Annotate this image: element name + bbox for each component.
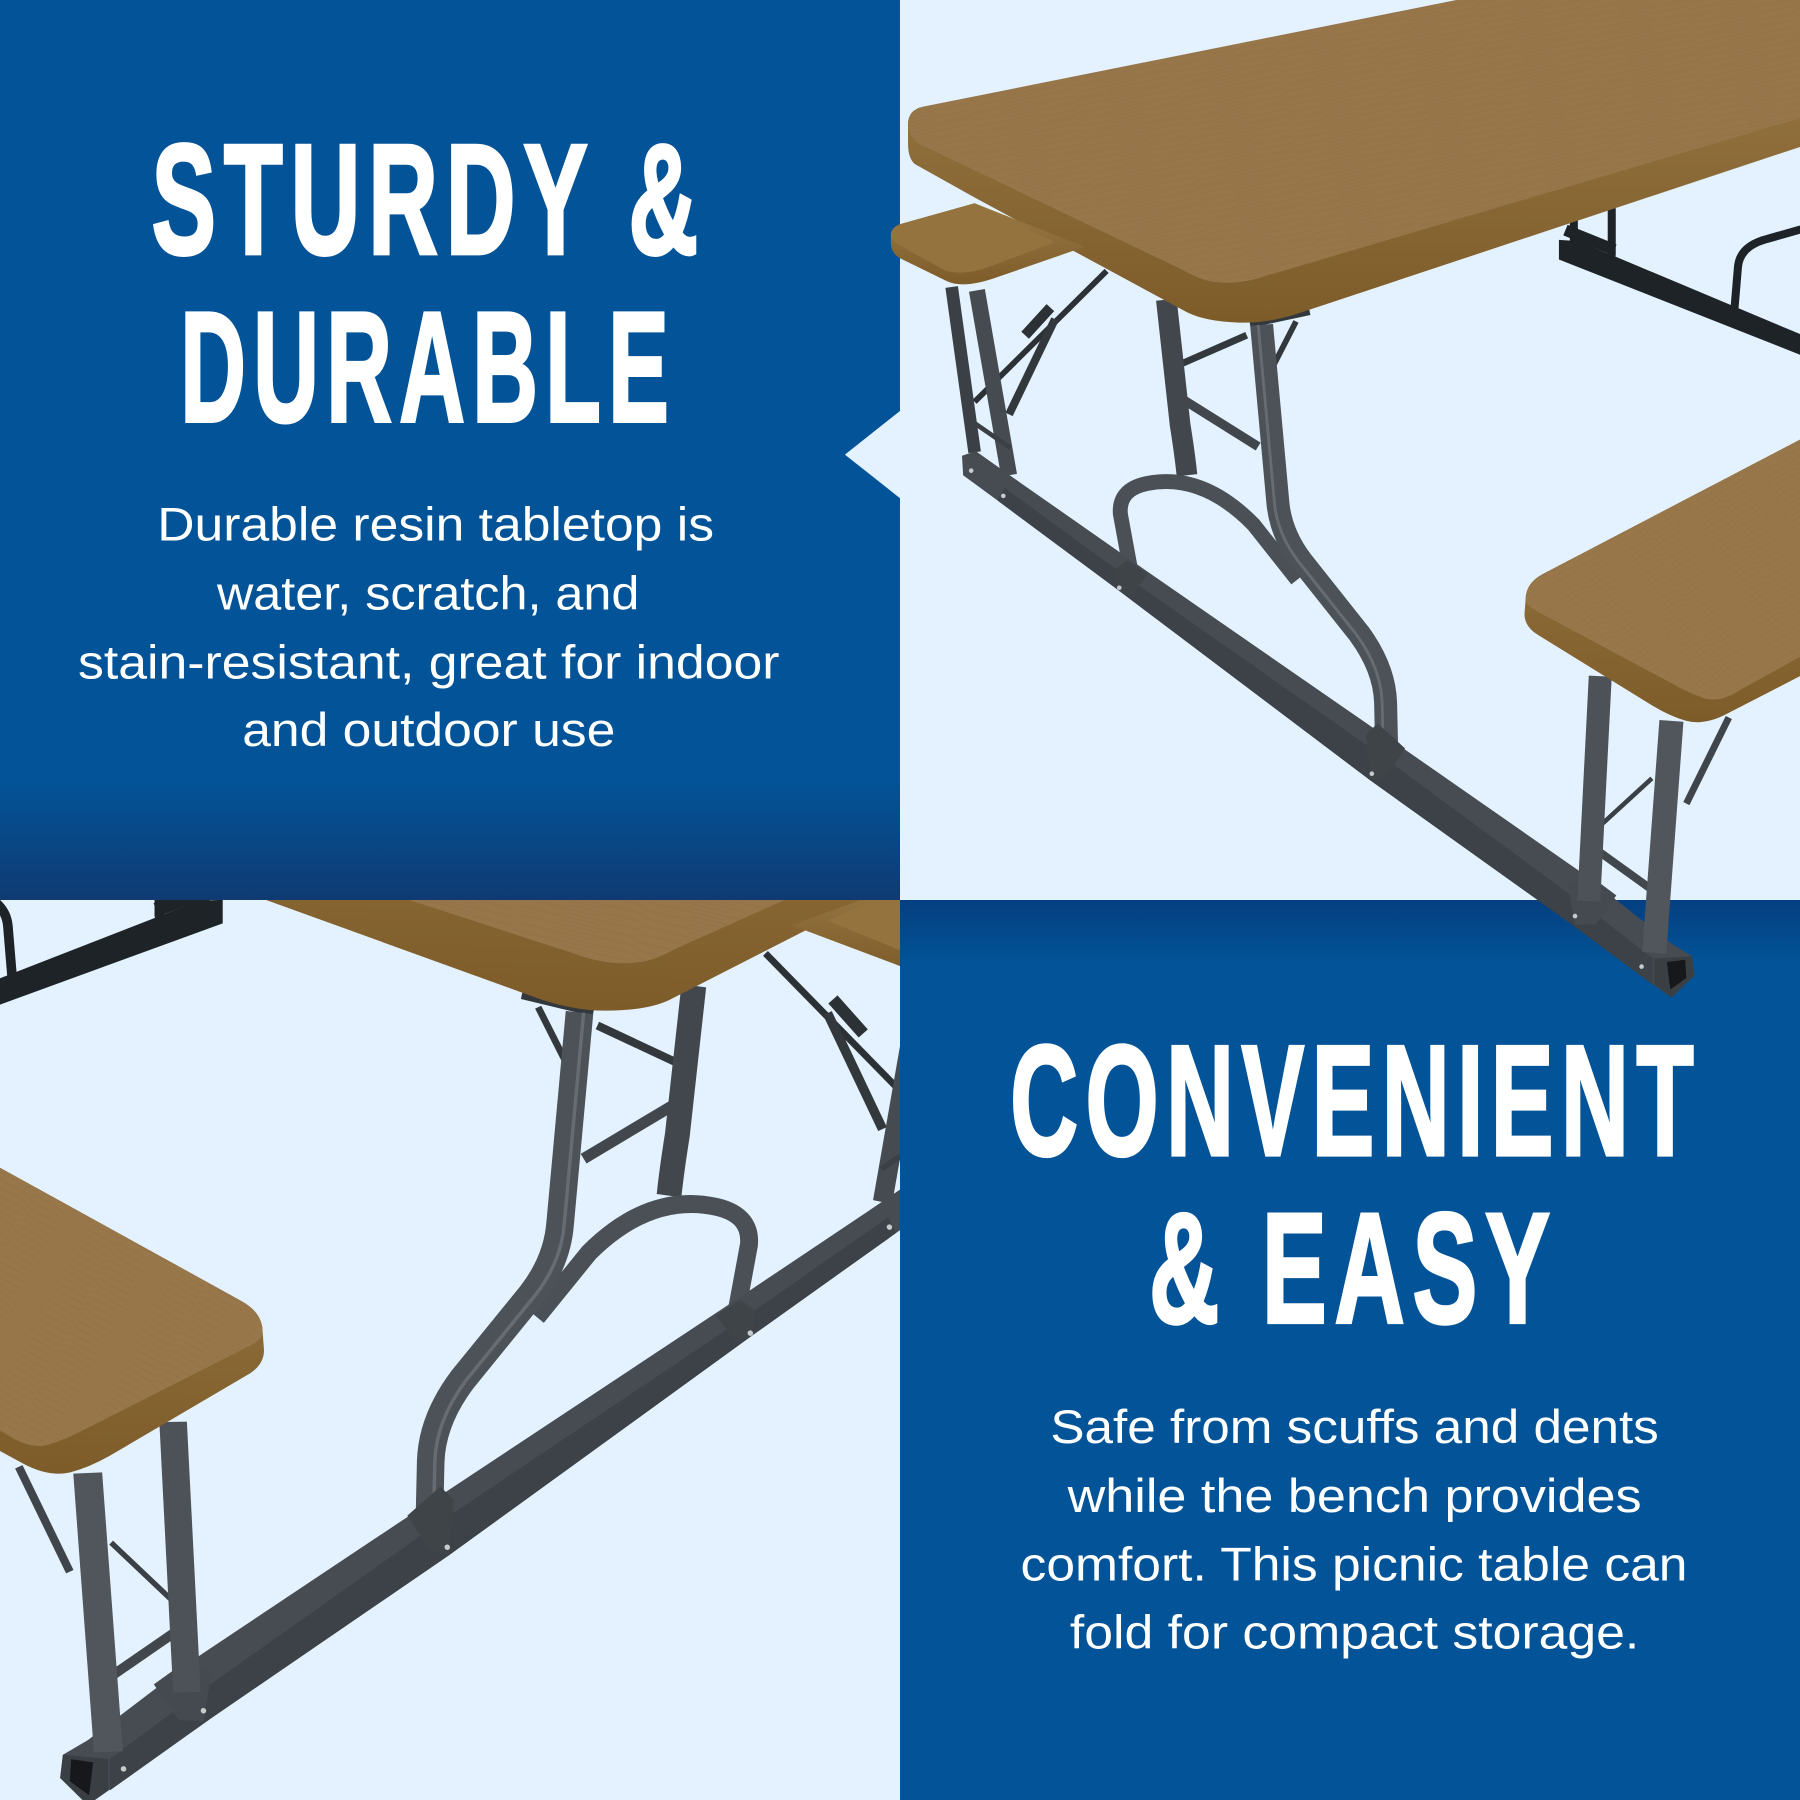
panel: top-left blue background xyxy=(0,0,900,900)
text block: durable description xyxy=(78,498,779,756)
text block: durable description: stain-resistant, great for indoor xyxy=(78,635,779,688)
photo: picnic table mirrored, bottom left xyxy=(0,900,900,1800)
panel: bottom-right blue background xyxy=(900,900,1800,1800)
photo: picnic table, top right xyxy=(891,0,1800,998)
right bench legs xyxy=(1589,676,1729,953)
text block: convenient description xyxy=(1021,1400,1688,1658)
panel: bottom-left light background xyxy=(0,900,900,1800)
text block: durable description: water, scratch, and xyxy=(216,567,639,620)
panel: top-right light background xyxy=(900,0,1800,900)
heading: convenient and easy: & EASY xyxy=(1149,1181,1558,1356)
right bench seat xyxy=(1524,440,1800,722)
text block: durable description: and outdoor use xyxy=(242,703,615,756)
left bench legs xyxy=(952,271,1107,475)
main floor rail xyxy=(962,451,1694,998)
text block: durable description: Durable resin tabletop is xyxy=(157,498,714,551)
heading: convenient and easy xyxy=(1010,1014,1701,1356)
heading: sturdy and durable: STURDY & xyxy=(152,113,706,288)
text block: convenient description: while the bench provides xyxy=(1066,1469,1642,1522)
tabletop xyxy=(908,0,1800,323)
arrow: bottom panel pointer xyxy=(900,1302,955,1389)
far side frame xyxy=(1559,209,1800,355)
heading: sturdy and durable xyxy=(152,113,706,455)
heading: sturdy and durable: DURABLE xyxy=(180,280,676,455)
table legs xyxy=(1120,300,1387,753)
left bench seat xyxy=(891,203,1085,284)
arrow: top panel pointer xyxy=(845,411,900,498)
text block: convenient description: comfort. This picnic table can xyxy=(1021,1538,1687,1591)
text block: convenient description: fold for compact storage. xyxy=(1070,1605,1639,1658)
text block: convenient description: Safe from scuffs and dents xyxy=(1050,1400,1659,1453)
